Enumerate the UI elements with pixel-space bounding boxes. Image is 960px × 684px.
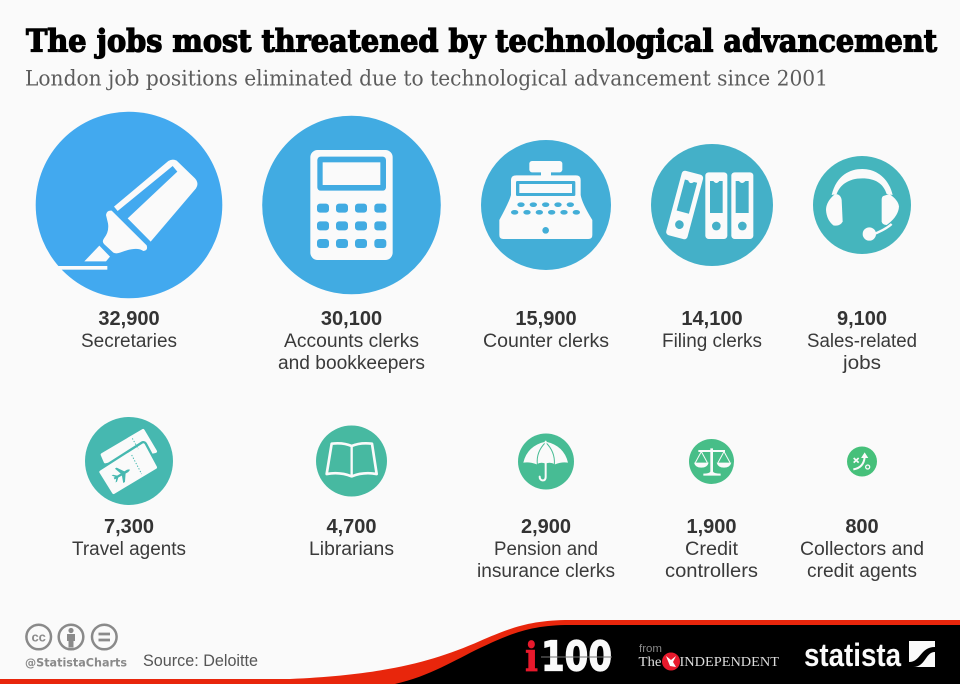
logo: i100: i	[525, 634, 538, 681]
value and label: Counter clerks	[483, 331, 609, 352]
item: secretaries	[36, 112, 222, 352]
value and label: 9,100	[837, 308, 887, 330]
item: travel agents	[72, 417, 186, 560]
value and label: 32,900	[98, 308, 160, 330]
value and label	[278, 308, 425, 374]
logo: the independent	[638, 643, 779, 670]
value and label: controllers	[665, 561, 758, 582]
value and label	[72, 516, 186, 560]
item: accounts clerks	[262, 116, 441, 374]
icon: plane tickets	[85, 417, 173, 505]
icon: open book	[316, 426, 387, 496]
value and label	[309, 516, 394, 560]
logo: the independent: The	[638, 655, 662, 670]
value and label: 7,300	[104, 516, 154, 538]
logo: i100	[525, 632, 612, 681]
creative commons icons: cc	[31, 630, 46, 644]
item: credit controllers	[665, 439, 758, 582]
item: collectors	[800, 446, 924, 582]
logo: i100: 100	[541, 632, 612, 680]
value and label	[483, 308, 609, 352]
value and label: 14,100	[681, 308, 743, 330]
value and label: credit agents	[807, 561, 917, 582]
creative commons icons	[26, 625, 117, 649]
value and label: Sales-related	[807, 331, 917, 352]
handle: @StatistaCharts	[25, 656, 127, 670]
value and label: 4,700	[326, 516, 377, 538]
value and label: Collectors and	[800, 539, 924, 560]
value and label: 15,900	[515, 308, 577, 330]
value and label: Librarians	[309, 539, 394, 560]
icon: umbrella	[518, 434, 574, 490]
logo: the independent: from	[639, 643, 662, 655]
value and label: Secretaries	[81, 331, 177, 352]
icon: calculator	[262, 116, 441, 294]
logo: the independent: INDEPENDENT	[680, 655, 779, 670]
icon: scales	[689, 439, 734, 484]
value and label	[662, 308, 762, 352]
item: filing clerks	[651, 144, 773, 352]
value and label: Filing clerks	[662, 331, 762, 352]
subtitle: London job positions eliminated due to technological advancement since 2001	[25, 66, 828, 90]
value and label: and bookkeepers	[278, 353, 425, 374]
value and label: insurance clerks	[477, 561, 615, 582]
source: Source: Deloitte	[143, 652, 258, 670]
item: counter clerks	[481, 140, 611, 352]
value and label	[800, 516, 924, 582]
icon: cash register	[481, 140, 611, 270]
value and label: 800	[845, 516, 879, 538]
item: librarians	[309, 426, 394, 560]
item: sales jobs	[807, 156, 917, 374]
value and label: Pension and	[494, 539, 598, 560]
value and label: Travel agents	[72, 539, 186, 560]
icon: binders	[651, 144, 773, 266]
icon: highlighter	[36, 112, 222, 298]
value and label	[477, 516, 615, 582]
value and label: Credit	[685, 539, 739, 560]
value and label: jobs	[842, 353, 881, 374]
value and label: 1,900	[686, 516, 737, 538]
value and label: 2,900	[521, 516, 571, 538]
value and label: 30,100	[321, 308, 382, 330]
icon: strategy arrow	[847, 446, 877, 476]
item: pension clerks	[477, 434, 615, 582]
value and label	[807, 308, 917, 374]
value and label	[81, 308, 177, 352]
footer band	[0, 620, 960, 684]
value and label	[665, 516, 758, 582]
icon: headset	[813, 156, 911, 254]
logo: statista: statista	[804, 637, 901, 673]
value and label: Accounts clerks	[284, 331, 419, 352]
